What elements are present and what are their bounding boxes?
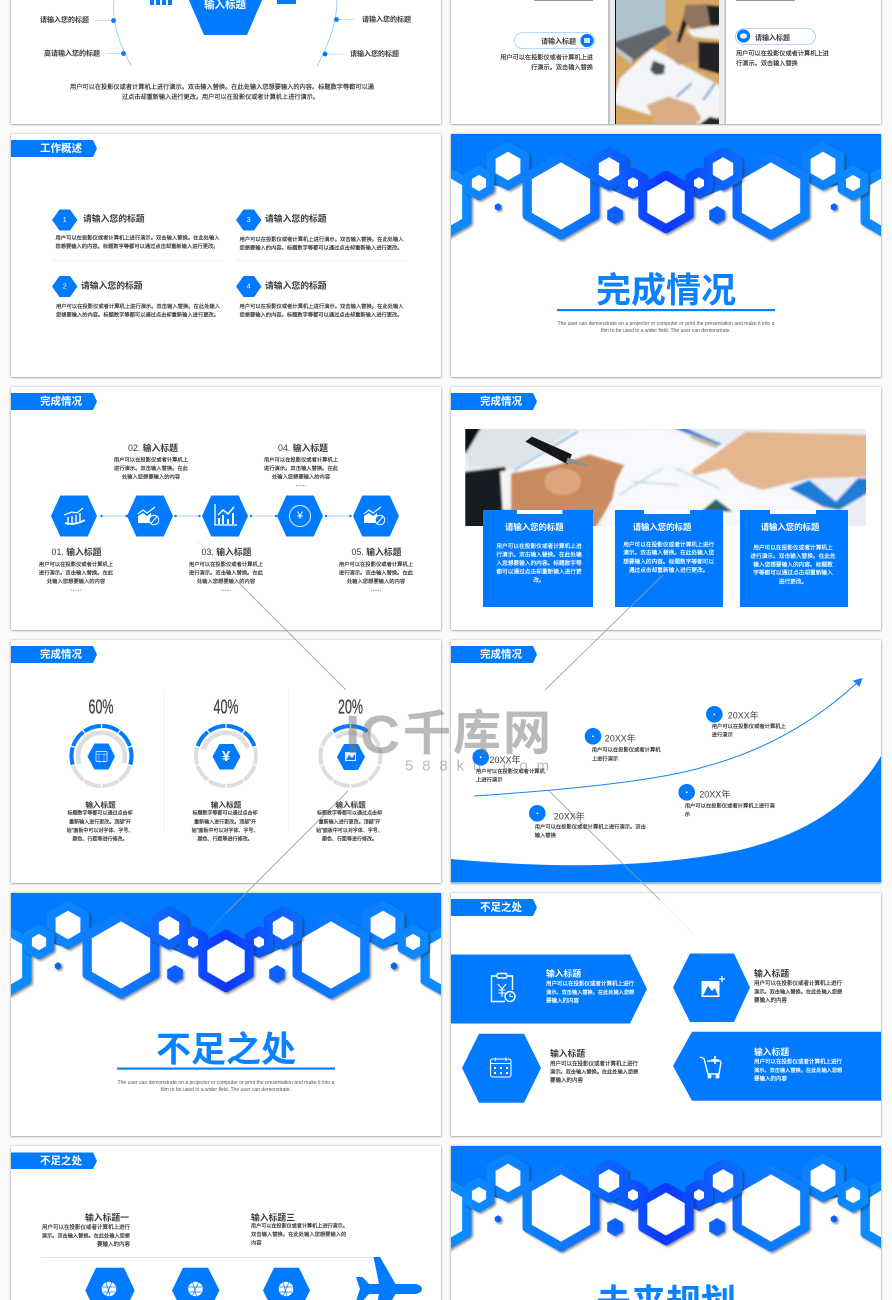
text block one: 要输入的内容 — [97, 1240, 130, 1248]
step 03 text: 03. 输入标题 — [202, 546, 252, 557]
panel: photo with three cards — [451, 387, 881, 630]
bottom blue swoosh — [451, 756, 881, 882]
card: bottom right with cart icon: 用户可以在投影仪或者计算机上进行 — [754, 1058, 843, 1066]
cover subtitle: The user can demonstrate on a projector or computer or print the presentation and make it into a — [558, 321, 775, 327]
icon: chart with no sign — [127, 496, 173, 536]
watermark logo and text: IC — [345, 705, 400, 765]
item 3: 请输入您的标题 — [265, 212, 327, 224]
ring 20% description: 标题数字等都可以通过点击却 — [317, 810, 382, 817]
point 3: 20XX年 — [728, 710, 759, 721]
ring 20% description: 输入标题 — [335, 800, 366, 810]
right arc with labels — [317, 0, 411, 66]
right arc with labels: 请输入您的标题 — [350, 49, 399, 58]
item 2 — [52, 276, 221, 318]
point 4: 示 — [685, 811, 690, 818]
card 2: 演示。双击输入替换。在此处输入您 — [623, 549, 715, 557]
icon: hand with growth chart — [51, 496, 97, 536]
point 4: 20XX年 — [699, 789, 730, 800]
ring 60% description — [67, 800, 133, 842]
item 3: 3 — [247, 217, 251, 224]
card 2 — [615, 510, 723, 607]
item 4: 4 — [247, 284, 251, 290]
card 1 — [483, 510, 593, 607]
step 01 text: 处输入您想要输入的内容 — [47, 577, 106, 585]
point 1 — [472, 749, 546, 784]
item 4: 请输入您的标题 — [265, 280, 327, 290]
tab heading — [451, 646, 537, 663]
point 2: 20XX年 — [605, 733, 636, 744]
right paragraph — [736, 50, 829, 68]
left paragraph: 行演示。双击输入替换 — [531, 64, 593, 72]
ring 60% — [64, 696, 139, 794]
left pill label: 请输入标题 — [541, 36, 576, 46]
description paragraph: 过点击却重新输入进行更改。用户可以在投影仪或者计算机上进行演示。 — [122, 93, 319, 101]
card: bottom left with calendar icon: 演示。双击输入替换。在此处输入您想 — [550, 1068, 638, 1076]
step 04 text: …… — [296, 482, 306, 488]
tab heading — [11, 140, 97, 157]
ring 40% description: 始"面板中可以对字体、字号、 — [192, 827, 258, 834]
left paragraph: 用户可以在投影仪或者计算机上进 — [500, 54, 593, 62]
card 2: 通过点击却重新输入进行更改。 — [629, 566, 709, 574]
step 04 text: 进行演示。双击输入替换。在此 — [264, 464, 339, 472]
left arc with labels: 请输入您的标题 — [40, 15, 89, 24]
hexagon node 1 — [85, 1268, 135, 1300]
step 05 text: 进行演示。双击输入替换。在此 — [339, 568, 414, 576]
left pill label — [514, 32, 594, 48]
watermark logo and text — [345, 705, 551, 774]
point 1: 上进行演示 — [476, 776, 502, 784]
left arc with labels — [40, 0, 131, 65]
cover title: 完成情况 — [596, 272, 736, 310]
item 1: 请输入您的标题 — [83, 212, 145, 224]
tab heading: 不足之处 — [40, 1154, 82, 1167]
panel: section cover 完成情况 — [399, 134, 892, 377]
step 04 text — [264, 442, 339, 488]
item 1: 您想要输入的内容。标题数字等都可以通过点击却重新输入进行更改。 — [56, 242, 218, 250]
item 1: 1 — [63, 217, 67, 224]
panel: airplane timeline slide (cropped bottom) — [11, 1146, 441, 1300]
panel: section cover 不足之处 — [0, 893, 493, 1136]
item 1 — [52, 210, 220, 250]
step 05 text: 05. 输入标题 — [352, 546, 402, 557]
step 01 text: 进行演示。双击输入替换。在此 — [39, 568, 114, 576]
ring 20% description: 始"面板中可以对字体、字号、 — [316, 827, 383, 834]
step 05 text: …… — [371, 586, 381, 592]
panel: phone photo slide (cropped top) — [451, 0, 881, 127]
card: bottom right with cart icon — [673, 1032, 881, 1101]
text block one: 输入标题一 — [85, 1211, 129, 1222]
card 2: 请输入您的标题 — [633, 522, 692, 532]
connectors — [100, 515, 352, 517]
item 3: 用户可以在投影仪或者计算机上进行演示。双击输入替换。在此处输入 — [240, 235, 404, 243]
hexagon banner — [451, 1146, 881, 1255]
hexagon banner — [451, 134, 881, 243]
point 2 — [585, 728, 661, 762]
card: bottom right with cart icon: 演示。双击输入替换。在此处输入您想 — [754, 1066, 842, 1074]
cover subtitle — [558, 321, 775, 334]
point 1: 20XX年 — [490, 754, 521, 765]
card: top right with image icon: 输入标题 — [754, 967, 789, 978]
ring 40% description: 颜色、行距等进行修改。 — [197, 835, 253, 842]
point 3: 用户可以在投影仪或者计算机上 — [712, 722, 787, 730]
icon: airplane — [356, 1257, 422, 1300]
card 3 — [740, 510, 848, 607]
step 02 text: 处输入您想要输入的内容 — [122, 472, 181, 480]
step 02 text: 02. 输入标题 — [128, 442, 178, 453]
step 04 text: 04. 输入标题 — [278, 442, 328, 453]
point 2: 用户可以在投影仪或者计算机 — [592, 746, 661, 754]
right pill label: 请输入标题 — [755, 33, 790, 42]
card 1: 请输入您的标题 — [505, 522, 564, 532]
item 3 — [236, 210, 404, 252]
step 02 text — [114, 442, 189, 480]
text block three: 内容 — [251, 1239, 262, 1247]
tab heading — [11, 1152, 97, 1169]
step 02 text: 进行演示。双击输入替换。在此 — [114, 464, 189, 472]
text block one: 用户可以在投影仪或者计算机上进行 — [42, 1223, 130, 1231]
panel: growth curve timeline slide — [451, 640, 881, 883]
icon: chart with no sign — [353, 496, 399, 536]
ring 20% description: 颜色、行距等进行修改。 — [322, 835, 377, 842]
step 01 text: …… — [71, 586, 81, 592]
card 3: 输入您想要输入的内容。标题数 — [753, 560, 833, 568]
cropped text above — [534, 0, 795, 1]
right paragraph: 用户可以在投影仪或者计算机上进 — [736, 50, 829, 58]
item 4: 用户可以在投影仪或者计算机上进行演示。双击输入替换。在此处输入 — [240, 302, 404, 310]
card: bottom left with calendar icon: 要输入的内容 — [550, 1076, 584, 1084]
ring 40% description: 输入标题 — [211, 800, 242, 810]
ring 60% description: 始"面板中可以对字体、字号、 — [67, 827, 133, 834]
card 3: 进行更改。 — [779, 577, 807, 585]
description paragraph: 用户可以在投影仪或者计算机上进行演示。双击输入替换。在此处输入您想要输入的内容。标题数字等都可以通 — [70, 83, 374, 91]
ring 40%: ¥ — [222, 748, 231, 765]
step 04 text: 处输入您想要输入的内容 — [272, 472, 331, 480]
left paragraph — [500, 54, 593, 72]
card 2: 用户可以在投影仪或者计算机上进行 — [623, 540, 715, 548]
watermark diagonal lines — [197, 540, 694, 935]
step 03 text: 处输入您想要输入的内容 — [197, 577, 256, 585]
point 3 — [706, 706, 787, 739]
icon: yen circle — [277, 496, 323, 536]
card: top left with clipboard icon: 用户可以在投影仪或者计算机上进行 — [546, 980, 635, 988]
item 2: 您想要输入的内容。标题数字等都可以通过点击却重新输入进行更改。 — [56, 310, 219, 318]
panel: five-step hexagon timeline — [11, 387, 441, 630]
card 3: 用户可以在投影仪或者计算机上 — [753, 544, 833, 552]
point 4: 用户可以在投影仪或者计算机上进行演 — [685, 801, 775, 809]
cover subtitle: film to be used in a wider field. The user can demonstrate. — [601, 328, 731, 334]
point 5: 用户可以在投影仪或者计算机上进行演示。双击 — [535, 822, 646, 830]
icon: bar chart — [202, 496, 248, 536]
ring 60% description: 颜色、行距等进行修改。 — [72, 835, 128, 842]
step 01 text: 01. 输入标题 — [52, 546, 102, 557]
card 3: 进行演示。双击输入替换。在此处 — [750, 552, 836, 560]
point 2: 上进行演示 — [592, 754, 618, 762]
point 5: 20XX年 — [554, 810, 585, 821]
right paragraph: 行演示。双击输入替换 — [736, 60, 798, 68]
item 3: 您想要输入的内容。标题数字等都可以通过点击却重新输入进行更改。 — [240, 244, 402, 252]
step 05 text: 处输入您想要输入的内容 — [347, 577, 406, 585]
panel: percentage rings slide — [11, 640, 441, 883]
tab heading: 工作概述 — [40, 142, 82, 154]
cover title: 不足之处 — [156, 1030, 296, 1070]
tab heading — [11, 393, 97, 410]
tab heading: 完成情况 — [40, 648, 82, 660]
tab heading: 完成情况 — [40, 394, 82, 408]
ring 20%: 20% — [338, 696, 363, 718]
item 2: 2 — [63, 284, 67, 290]
central hexagon with title — [188, 0, 263, 35]
description paragraph — [70, 83, 374, 101]
right arc with labels: 请输入您的标题 — [362, 14, 411, 24]
tab heading: 不足之处 — [480, 900, 522, 914]
panel: section cover 未来规划 (cropped bottom) — [399, 1146, 892, 1300]
card: top left with clipboard icon — [451, 954, 647, 1024]
card: top left with clipboard icon: 演示。双击输入替换。在此处输入您想 — [546, 988, 634, 996]
item 2: 请输入您的标题 — [81, 280, 143, 290]
watermark logo and text: 千库网 — [403, 708, 551, 760]
step 03 text: 进行演示。双击输入替换。在此 — [189, 568, 264, 576]
card: top right with image icon: 用户可以在投影仪或者计算机上进行 — [754, 979, 843, 987]
card 3: 请输入您的标题 — [761, 522, 820, 532]
item 2: 用户可以在投影仪或者计算机上进行演示。双击输入替换。在此处输入 — [56, 302, 221, 310]
panel: work overview slide — [11, 134, 441, 377]
point 5: 输入替换 — [535, 831, 557, 839]
card 1: 入您想要输入的内容。标题数字等 — [496, 559, 582, 567]
ring 20% description — [316, 800, 383, 842]
phone frame with photo of hands signing documents — [608, 0, 726, 127]
left arc with labels: 高请输入您的标题 — [44, 48, 100, 58]
card: bottom left with calendar icon — [462, 1034, 639, 1103]
text block three: 用户可以在投影仪或者计算机上进行演示。 — [251, 1222, 348, 1229]
panel: four hexagon cards — [451, 893, 881, 1136]
step 01 text: 用户可以在投影仪或者计算机上 — [39, 560, 114, 568]
right pill label — [736, 28, 816, 44]
ring 40% — [188, 696, 264, 794]
card: bottom right with cart icon: 输入标题 — [754, 1046, 789, 1057]
ring 60% description: 重新输入进行更改。顶部"开 — [69, 818, 131, 825]
icon fragments above centre — [150, 0, 296, 5]
card 3: 字等都可以通过点击却重新输入 — [753, 569, 833, 577]
item 1: 用户可以在投影仪或者计算机上进行演示。双击输入替换。在此处输入 — [56, 234, 220, 242]
icon: yen circle: ¥ — [296, 510, 304, 522]
card: top right with image icon — [673, 954, 843, 1022]
ring 60%: 60% — [88, 696, 114, 718]
tab heading: 完成情况 — [480, 648, 522, 660]
card: top left with clipboard icon: 输入标题 — [546, 967, 581, 978]
cover subtitle: film to be used in a wider field. The user can demonstrate. — [161, 1087, 291, 1093]
card: bottom right with cart icon: 要输入的内容 — [754, 1074, 788, 1082]
hexagon banner — [11, 893, 441, 1002]
card 2: 想要输入的内容。标题数字等都可以 — [623, 557, 715, 565]
tab heading — [451, 899, 537, 916]
card 1: 都可以通过点击却重新输入进行更 — [496, 568, 582, 576]
text block three: 输入标题三 — [251, 1211, 295, 1222]
hexagon node 2 — [172, 1268, 220, 1300]
step 03 text: …… — [221, 586, 231, 592]
watermark logo and text: 588ku.com — [405, 758, 549, 774]
cover subtitle: The user can demonstrate on a projector or computer or print the presentation and make it into a — [118, 1080, 335, 1086]
point 4 — [678, 784, 775, 818]
tab heading — [11, 646, 97, 663]
step 04 text: 用户可以在投影仪或者计算机上 — [264, 456, 339, 464]
point 3: 进行演示 — [712, 731, 733, 739]
panel: radial diagram slide (cropped top) — [11, 0, 441, 124]
arrow curve — [474, 678, 862, 796]
ring 40%: 40% — [214, 696, 239, 718]
card: bottom left with calendar icon: 用户可以在投影仪或者计算机上进行 — [550, 1059, 639, 1067]
cover subtitle — [118, 1080, 335, 1093]
ring 40% description: 重新输入进行更改。顶部"开 — [194, 818, 256, 825]
photo: hands signing a document — [465, 429, 866, 526]
step 03 text: 用户可以在投影仪或者计算机上 — [189, 560, 264, 568]
ring 20% — [309, 696, 392, 798]
card 1: 行演示。双击输入替换。在此处输 — [496, 551, 582, 559]
tab heading — [451, 393, 537, 410]
step 01 text — [39, 546, 114, 592]
step 05 text: 用户可以在投影仪或者计算机上 — [339, 560, 414, 568]
point 1: 用户可以在投影仪或者计算机 — [476, 767, 546, 775]
step 05 text — [339, 546, 414, 592]
card: top right with image icon: 演示。双击输入替换。在此处输入您想 — [754, 987, 842, 995]
card: bottom left with calendar icon: 输入标题 — [550, 1048, 585, 1059]
item 4: 您想要输入的内容。标题数字等都可以通过点击却重新输入进行更改。 — [240, 310, 402, 318]
tab heading: 完成情况 — [480, 394, 522, 408]
card 1: 用户可以在投影仪或者计算机上进 — [496, 542, 582, 550]
card: top left with clipboard icon: 要输入的内容 — [546, 996, 580, 1004]
card: top right with image icon: 要输入的内容 — [754, 996, 788, 1004]
text block three: 双击输入替换。在此处输入您想要输入的 — [251, 1230, 346, 1238]
text block one: 演示。双击输入替换。在此处输入您想 — [42, 1232, 130, 1240]
ring 40% description: 标题数字等都可以通过点击却 — [192, 810, 258, 817]
item 4 — [236, 276, 404, 318]
text block three — [251, 1211, 348, 1247]
card 1: 改。 — [533, 576, 545, 584]
text block one — [42, 1211, 130, 1248]
point 5 — [529, 805, 646, 839]
ring 60% description: 输入标题 — [85, 800, 116, 810]
hexagon node 3 — [263, 1268, 310, 1300]
ring 60% description: 标题数字等都可以通过点击却 — [67, 810, 133, 817]
ring 20% description: 重新输入进行更改。顶部"开 — [319, 818, 380, 825]
step 02 text: 用户可以在投影仪或者计算机上 — [114, 456, 189, 464]
ring 40% description — [192, 800, 258, 842]
step 03 text — [189, 546, 264, 592]
